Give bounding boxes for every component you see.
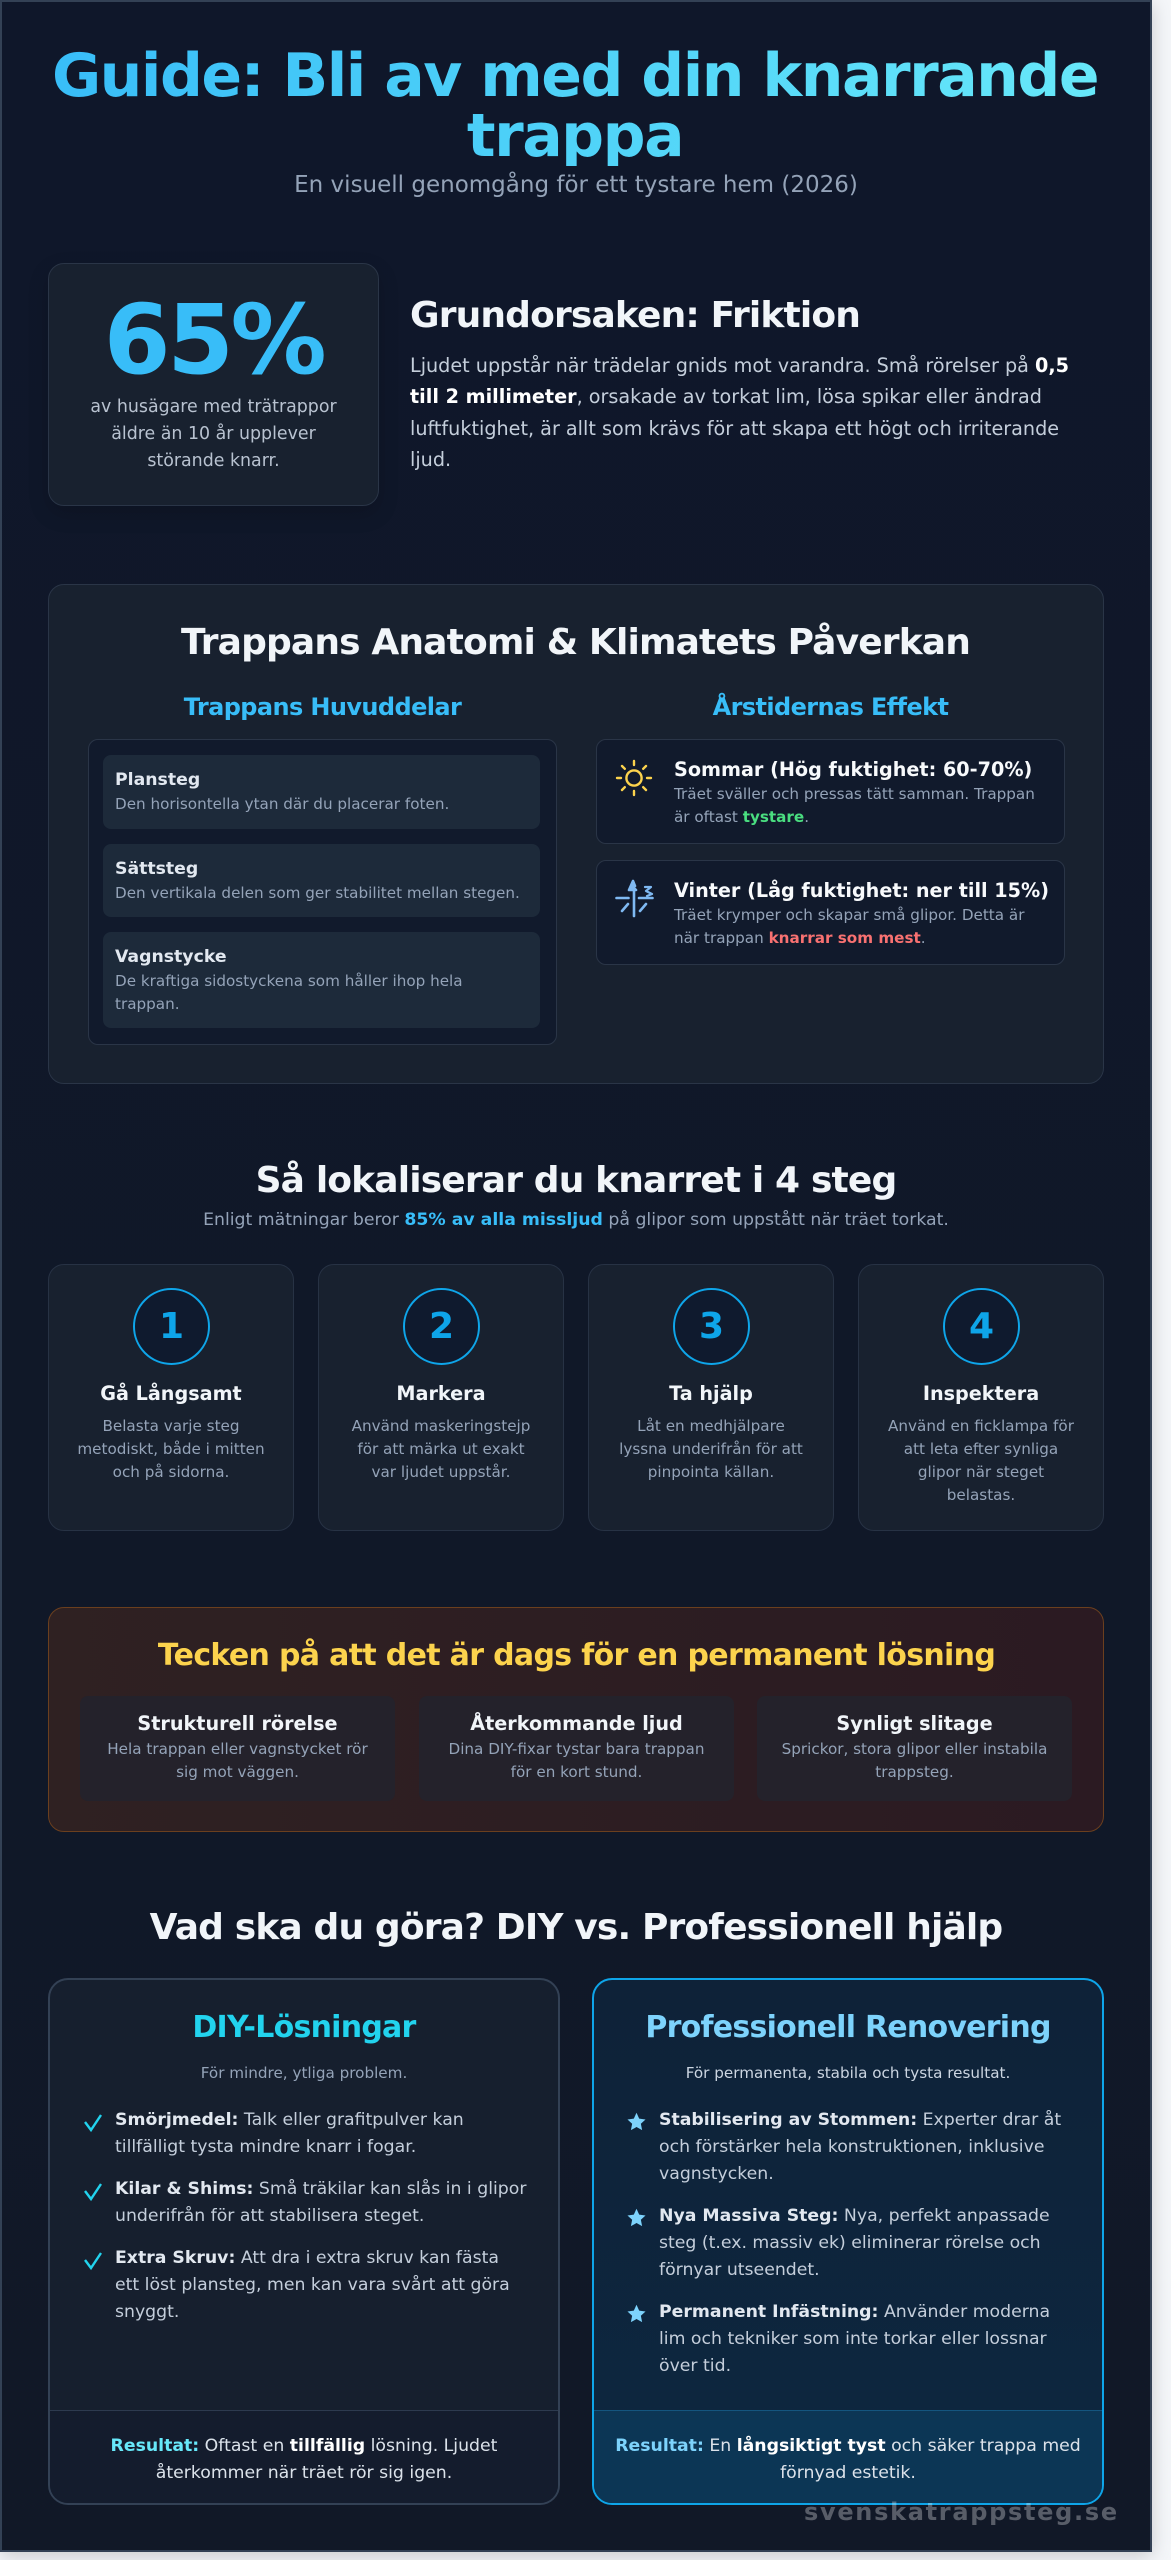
sign title: Återkommande ljud <box>470 1712 683 1735</box>
season description <box>674 906 1024 947</box>
title: trappa <box>467 101 683 171</box>
part name: Plansteg <box>115 770 200 790</box>
item text: snyggt. <box>115 2302 179 2322</box>
item text: Extra Skruv: Att dra i extra skruv kan fästa <box>115 2248 499 2268</box>
subheading: seasons: Årstidernas Effekt <box>713 693 948 721</box>
part description: Den vertikala delen som ger stabilitet mellan stegen. <box>115 884 520 902</box>
step description: var ljudet uppstår. <box>372 1463 510 1481</box>
step description: Använd maskeringstejp <box>352 1417 530 1435</box>
DIY item 1 <box>84 2110 464 2157</box>
season description <box>674 785 1035 826</box>
stat description <box>90 397 337 471</box>
panel: anatomy and climate <box>48 584 1104 1084</box>
icon: star <box>628 2304 646 2322</box>
stat number: 65% <box>104 284 323 396</box>
step description: metodiskt, både i mitten <box>77 1440 265 1458</box>
paragraph: root cause: luftfuktighet, är allt som krävs för att skapa ett högt och irriterande <box>410 417 1059 440</box>
item text: över tid. <box>659 2356 731 2376</box>
step number: 3 <box>699 1306 724 1347</box>
step 3 <box>588 1264 834 1531</box>
professional result <box>594 2410 1102 2505</box>
icon: check <box>84 2114 102 2132</box>
step number <box>133 1288 210 1365</box>
paragraph: root cause <box>410 354 1069 471</box>
professional item 3 <box>628 2302 1050 2376</box>
step description: belastas. <box>947 1486 1015 1504</box>
step description: Använd en ficklampa för <box>888 1417 1074 1435</box>
part: Plansteg <box>103 755 540 829</box>
step number <box>403 1288 480 1365</box>
sign: structural movement <box>80 1696 395 1801</box>
icon: check <box>84 2252 102 2270</box>
box: stair parts <box>88 739 557 1045</box>
sign: recurring sound <box>419 1696 734 1801</box>
part name: Sättsteg <box>115 859 198 879</box>
step description: och på sidorna. <box>113 1463 229 1481</box>
item text <box>115 2248 510 2322</box>
sign description: sig mot väggen. <box>176 1763 299 1781</box>
item text: vagnstycken. <box>659 2164 774 2184</box>
heading: anatomy: Trappans Anatomi & Klimatets Påverkan <box>181 622 970 663</box>
sign: visible wear <box>757 1696 1072 1801</box>
stat card: 65% <box>48 263 379 506</box>
professional subtitle: För permanenta, stabila och tysta resultat. <box>686 2064 1010 2082</box>
professional item 1 <box>628 2110 1061 2184</box>
step description: glipor när steget <box>918 1463 1044 1481</box>
sign description <box>107 1740 368 1781</box>
sign title: Synligt slitage <box>836 1712 993 1735</box>
season description: Träet krymper och skapar små glipor. Detta är <box>674 906 1024 924</box>
professional item 2 <box>628 2206 1050 2280</box>
professional heading: Professionell Renovering <box>645 2010 1051 2045</box>
paragraph: root cause: till 2 millimeter, orsakade av torkat lim, lösa spikar eller ändrad <box>410 385 1042 408</box>
sign description: Hela trappan eller vagnstycket rör <box>107 1740 368 1758</box>
panel: DIY <box>48 1978 560 2505</box>
item text <box>115 2179 526 2226</box>
step description: att leta efter synliga <box>904 1440 1058 1458</box>
DIY subtitle: För mindre, ytliga problem. <box>201 2064 407 2082</box>
step description: för att märka ut exakt <box>357 1440 525 1458</box>
stat description: av husägare med trätrappor <box>90 397 337 417</box>
heading: what to do: Vad ska du göra? DIY vs. Professionell hjälp <box>150 1907 1002 1948</box>
icon: star <box>628 2112 646 2130</box>
icon: sun <box>616 760 652 796</box>
step description: Låt en medhjälpare <box>637 1417 785 1435</box>
subtitle: En visuell genomgång för ett tystare hem (2026) <box>294 172 858 198</box>
season description: är oftast tystare. <box>674 808 809 826</box>
sign description: Sprickor, stora glipor eller instabila <box>782 1740 1047 1758</box>
season description: när trappan knarrar som mest. <box>674 929 926 947</box>
part description: Den horisontella ytan där du placerar foten. <box>115 795 449 813</box>
panel: warning signs <box>48 1607 1104 1832</box>
step description: Belasta varje steg <box>102 1417 240 1435</box>
stat description: störande knarr. <box>147 451 280 471</box>
step title: Inspektera <box>923 1382 1039 1405</box>
result text: förnyad estetik. <box>780 2463 916 2483</box>
icon: star <box>628 2208 646 2226</box>
item text: Stabilisering av Stommen: Experter drar åt <box>659 2110 1061 2130</box>
item text: steg (t.ex. massiv ek) eliminerar rörelse och <box>659 2233 1041 2253</box>
title: Guide: Bli av med din knarrande <box>52 41 1098 111</box>
step description <box>77 1417 265 1481</box>
season description: Träet sväller och pressas tätt samman. Trappan <box>674 785 1035 803</box>
paragraph: root cause: ljud. <box>410 448 451 471</box>
season card: summer <box>596 739 1065 844</box>
part name: Vagnstycke <box>115 947 227 967</box>
warning heading: Tecken på att det är dags för en permanent lösning <box>158 1638 995 1673</box>
heading: root cause: Grundorsaken: Friktion <box>410 295 860 336</box>
item text: lim och tekniker som inte torkar eller lossnar <box>659 2329 1047 2349</box>
item text <box>659 2206 1050 2280</box>
sign description <box>782 1740 1047 1781</box>
heading: locate the squeak: Så lokaliserar du knarret i 4 steg <box>256 1160 896 1201</box>
item text: Nya Massiva Steg: Nya, perfekt anpassade <box>659 2206 1050 2226</box>
item text <box>115 2110 464 2157</box>
sign title: Strukturell rörelse <box>137 1712 338 1735</box>
item text: underifrån för att stabilisera steget. <box>115 2206 424 2226</box>
stat description: äldre än 10 år upplever <box>111 424 316 444</box>
step description <box>888 1417 1074 1504</box>
result text: Resultat: Oftast en tillfällig lösning. Ljudet <box>111 2436 497 2456</box>
season title: Sommar (Hög fuktighet: 60-70%) <box>674 758 1032 781</box>
step description <box>619 1417 803 1481</box>
step number <box>943 1288 1020 1365</box>
item text: förnyar utseendet. <box>659 2260 820 2280</box>
item text: tillfälligt tysta mindre knarr i fogar. <box>115 2137 416 2157</box>
season card: winter <box>596 860 1065 965</box>
item text: Permanent Infästning: Använder moderna <box>659 2302 1050 2322</box>
part description <box>115 972 463 1013</box>
step number: 4 <box>969 1306 994 1347</box>
step description <box>352 1417 530 1481</box>
item text: ett löst plansteg, men kan vara svårt att göra <box>115 2275 510 2295</box>
item text <box>659 2302 1050 2376</box>
step 1 <box>48 1264 294 1531</box>
step number <box>673 1288 750 1365</box>
part: Vagnstycke <box>103 932 540 1028</box>
step title: Markera <box>396 1382 486 1405</box>
icon: winter <box>615 880 654 918</box>
step 2 <box>318 1264 564 1531</box>
DIY item 3 <box>84 2248 510 2322</box>
step number: 1 <box>159 1306 184 1347</box>
result text <box>615 2436 1081 2483</box>
season title: Vinter (Låg fuktighet: ner till 15%) <box>674 879 1049 902</box>
part description: De kraftiga sidostyckena som håller ihop hela <box>115 972 463 990</box>
item text: Smörjmedel: Talk eller grafitpulver kan <box>115 2110 464 2130</box>
item text <box>659 2110 1061 2184</box>
step description: pinpointa källan. <box>648 1463 774 1481</box>
step number: 2 <box>429 1306 454 1347</box>
result text <box>111 2436 497 2483</box>
sign description <box>449 1740 704 1781</box>
result text: återkommer när träet rör sig igen. <box>156 2463 452 2483</box>
panel: professional <box>592 1978 1104 2505</box>
subheading: locate the squeak: Enligt mätningar beror 85% av alla missljud på glipor som uppstått när träet torkat. <box>203 1210 949 1230</box>
result text: Resultat: En långsiktigt tyst och säker trappa med <box>615 2436 1081 2456</box>
part: Sättsteg <box>103 844 540 917</box>
step description: lyssna underifrån för att <box>619 1440 803 1458</box>
DIY result <box>50 2410 558 2505</box>
subheading: main parts: Trappans Huvuddelar <box>184 693 461 721</box>
watermark: svenskatrappsteg.se <box>804 2498 1119 2526</box>
title <box>47 46 1103 166</box>
part description: trappan. <box>115 995 180 1013</box>
sign description: för en kort stund. <box>511 1763 642 1781</box>
paragraph: root cause: Ljudet uppstår när trädelar gnids mot varandra. Små rörelser på 0,5 <box>410 354 1069 377</box>
sign description: trappsteg. <box>875 1763 954 1781</box>
item text: Kilar & Shims: Små träkilar kan slås in i glipor <box>115 2179 526 2199</box>
step title: Gå Långsamt <box>100 1382 242 1405</box>
sign description: Dina DIY-fixar tystar bara trappan <box>449 1740 704 1758</box>
step title: Ta hjälp <box>669 1382 753 1405</box>
DIY heading: DIY-Lösningar <box>192 2010 416 2045</box>
DIY item 2 <box>84 2179 526 2226</box>
icon: check <box>84 2183 102 2202</box>
item text: och förstärker hela konstruktionen, inklusive <box>659 2137 1044 2157</box>
step 4 <box>858 1264 1104 1531</box>
